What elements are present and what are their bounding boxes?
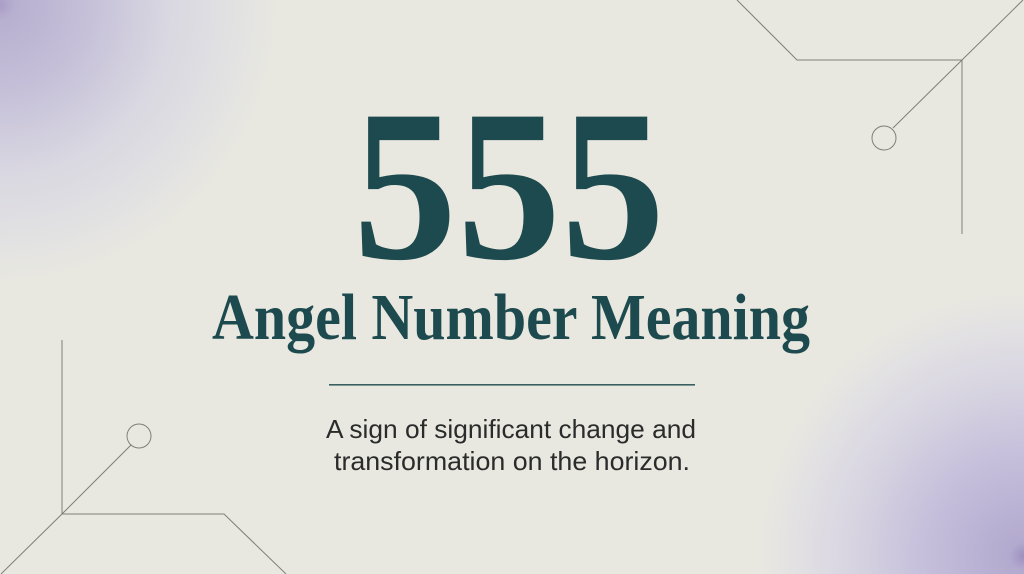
purple glow: top left [0,0,320,320]
subtitle text: A sign of significant change and [326,414,696,444]
heading: Angel Number Meaning: Angel Number Meaning [212,281,810,354]
divider rule [329,384,695,386]
line ornament: top right [737,0,1023,234]
line ornament: bottom left [1,340,286,574]
title number 555: 555 [353,66,665,305]
subtitle text [326,414,696,476]
subtitle text: transformation on the horizon. [334,446,690,476]
purple glow: bottom right [724,260,1024,574]
